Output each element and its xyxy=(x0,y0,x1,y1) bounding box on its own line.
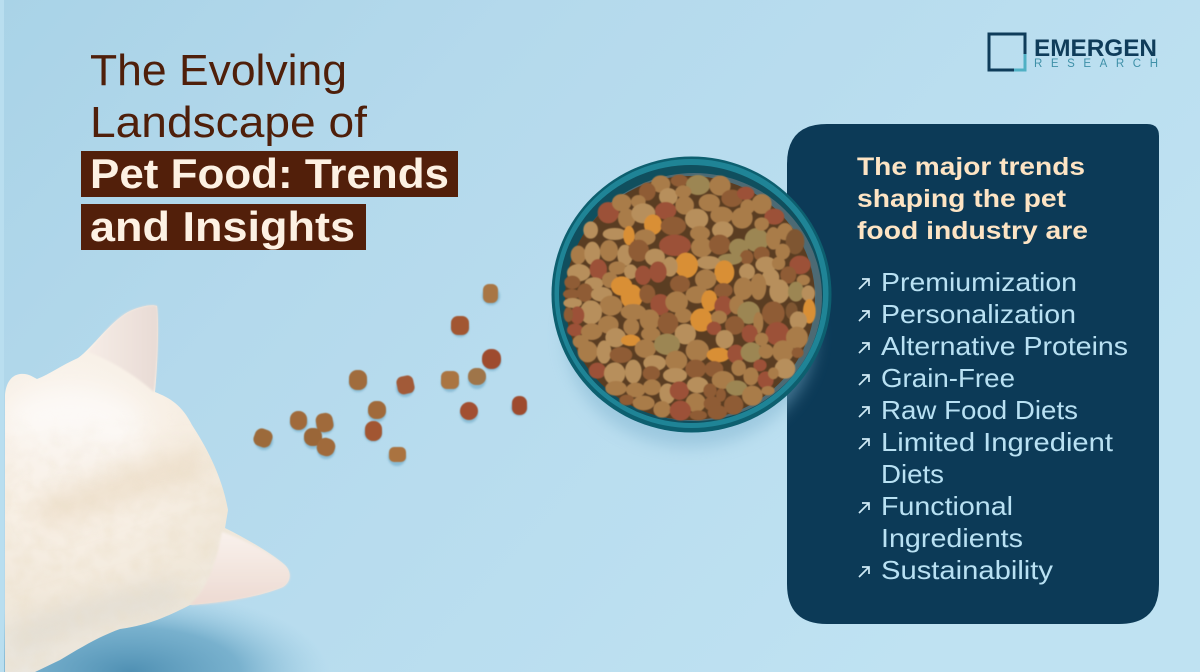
panel heading: food industry are xyxy=(857,217,1088,245)
scattered kibble xyxy=(251,284,527,466)
bowl rim xyxy=(552,156,832,432)
item: Premiumization: Premiumization xyxy=(881,267,1077,297)
item: Functional Ingredients xyxy=(859,491,1023,553)
item: Grain-Free: Grain-Free xyxy=(881,363,1015,393)
logo subtitle: RESEARCH xyxy=(1034,58,1158,70)
kibble shadows xyxy=(255,287,527,466)
cat lower ear xyxy=(190,532,290,605)
item: Limited Ingredient Diets: Diets xyxy=(881,459,944,489)
bowl shadow xyxy=(565,223,815,447)
kibble in bowl xyxy=(564,175,815,420)
panel: major trends xyxy=(787,124,1159,624)
kibble pieces xyxy=(251,284,527,462)
trend list xyxy=(859,267,1128,585)
item: Functional Ingredients: Ingredients xyxy=(881,523,1023,553)
food bed xyxy=(565,176,815,420)
panel heading xyxy=(857,153,1088,245)
panel heading: shaping the pet xyxy=(857,185,1067,213)
item: Raw Food Diets: Raw Food Diets xyxy=(881,395,1078,425)
panel heading: The major trends xyxy=(857,153,1085,181)
item: Personalization: Personalization xyxy=(881,299,1076,329)
cat body xyxy=(5,305,290,672)
cat top ear xyxy=(88,305,158,392)
logo xyxy=(989,34,1158,70)
title xyxy=(81,46,458,250)
cat fur texture xyxy=(6,401,212,666)
title highlight line two: and Insights xyxy=(90,203,355,250)
item: Limited Ingredient Diets xyxy=(859,427,1114,489)
cat seen from above xyxy=(0,0,340,672)
item: Limited Ingredient Diets: Limited Ingredient xyxy=(881,427,1114,457)
cat left strip xyxy=(0,0,4,672)
logo mark xyxy=(989,34,1025,70)
item: Alternative Proteins: Alternative Proteins xyxy=(881,331,1128,361)
item: Functional Ingredients: Functional xyxy=(881,491,1013,521)
title highlight line one: Pet Food: Trends xyxy=(90,150,449,197)
title plain lines: The Evolving xyxy=(90,46,347,95)
bowl inner wall xyxy=(566,173,822,421)
panel background xyxy=(787,124,1159,624)
logo wordmark: EMERGEN xyxy=(1034,35,1157,62)
title plain lines xyxy=(90,46,368,147)
cat shadow xyxy=(0,590,340,672)
food bowl xyxy=(552,156,832,447)
item: Sustainability: Sustainability xyxy=(881,555,1053,585)
title plain lines: Landscape of xyxy=(90,98,368,147)
